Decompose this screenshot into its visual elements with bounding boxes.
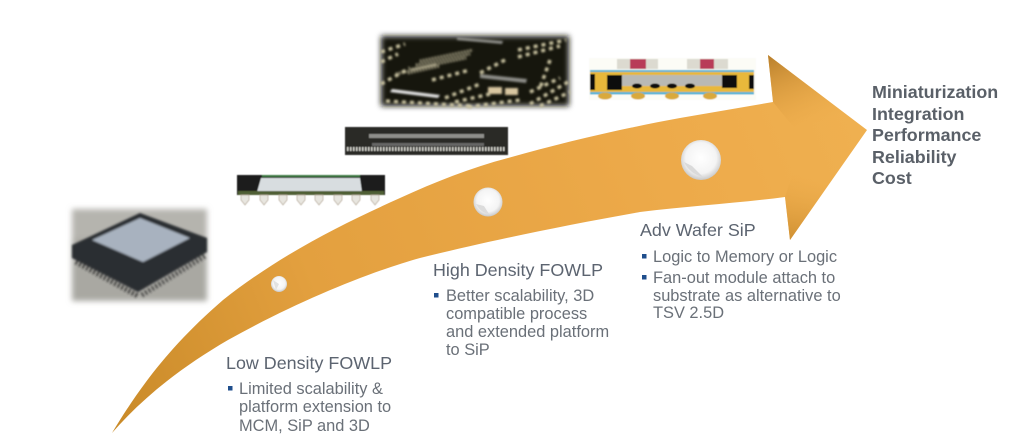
bullet text: and extended platform (446, 323, 609, 341)
bullet text: Limited scalability & (239, 380, 383, 398)
text: outcome list: Cost (872, 168, 912, 188)
photo: board with dies (381, 36, 570, 107)
bullet marker two (642, 275, 646, 280)
heading: low density: Low Density FOWLP (226, 353, 392, 373)
bullet marker (434, 293, 438, 298)
bullet text: compatible process (446, 305, 587, 323)
growth arrow (112, 55, 867, 433)
bullet text two: substrate as alternative to (653, 287, 841, 305)
text: outcome list: Integration (872, 104, 964, 124)
bullet marker (228, 386, 232, 390)
photo: high density cross-section (345, 127, 508, 155)
node: adv wafer (681, 140, 721, 180)
text: outcome list: Reliability (872, 147, 957, 167)
text: outcome list: Performance (872, 125, 981, 145)
heading: adv wafer: Adv Wafer SiP (640, 220, 756, 240)
node: high density (474, 188, 502, 216)
photo: low density cross-section (237, 175, 385, 205)
text: low density FOWLP (226, 353, 392, 435)
bullet text two: TSV 2.5D (653, 304, 724, 322)
node: low density (271, 276, 287, 292)
text: adv wafer SiP (640, 220, 841, 322)
text: outcome list: Miniaturization (872, 82, 998, 102)
photo: packaged chip (72, 209, 207, 301)
text: high density FOWLP (433, 260, 609, 359)
bullet text: platform extension to (239, 398, 391, 416)
heading: high density: High Density FOWLP (433, 260, 603, 280)
bullet text: Better scalability, 3D (446, 287, 594, 305)
bullet text two: Fan-out module attach to (653, 269, 835, 287)
bullet text: to SiP (446, 341, 490, 359)
bullet text: MCM, SiP and 3D (239, 417, 370, 435)
bullet text one: Logic to Memory or Logic (653, 248, 837, 266)
bullet marker one (642, 254, 646, 258)
photo: SiP cross-section (589, 58, 756, 100)
